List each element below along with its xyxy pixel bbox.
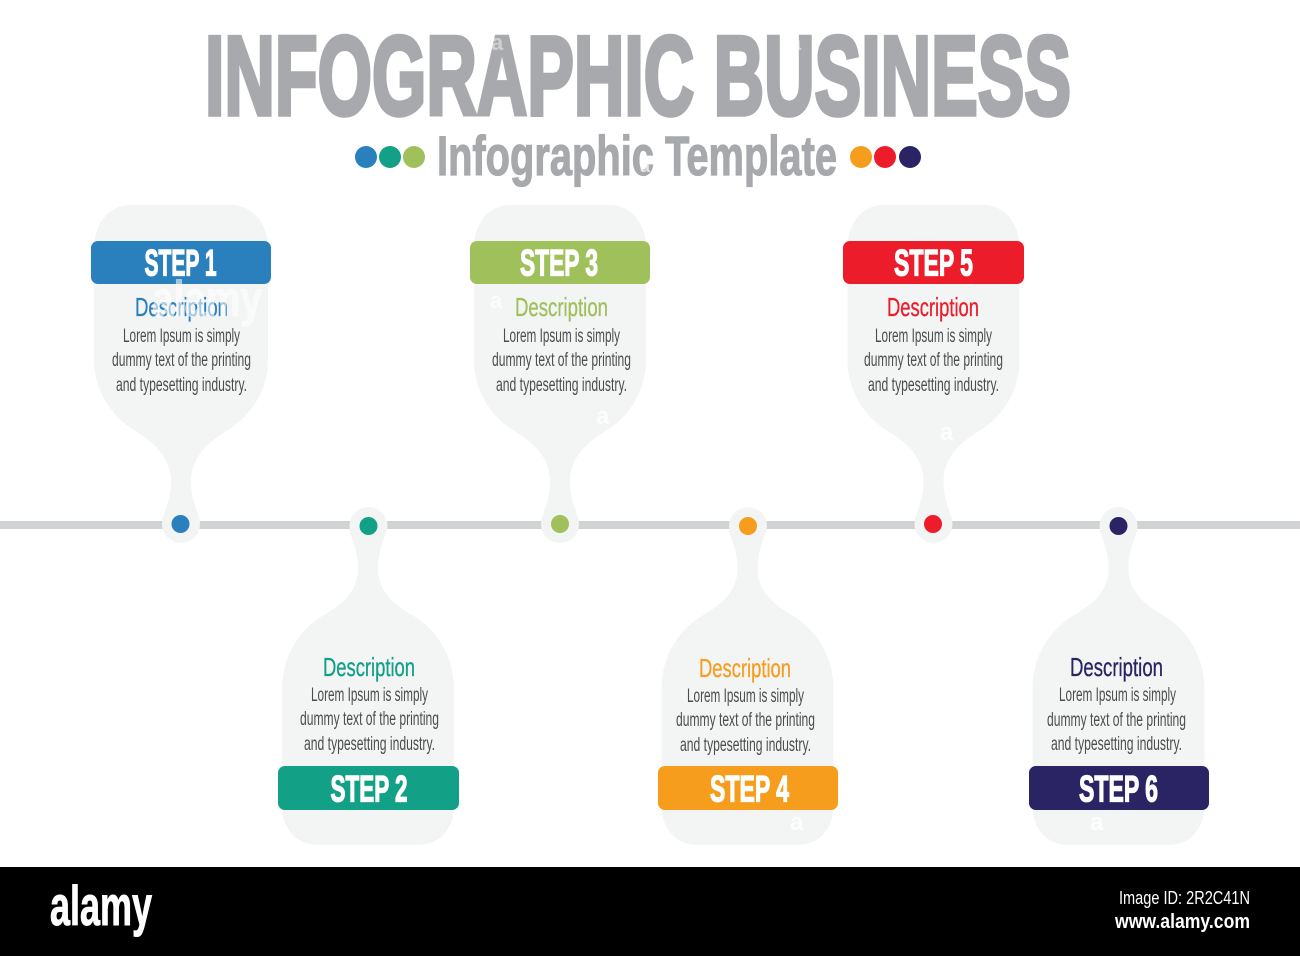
watermark <box>152 30 1104 836</box>
watermark: a <box>940 419 954 446</box>
callout shape <box>474 205 646 543</box>
watermark: a <box>596 403 610 430</box>
step banner <box>843 241 1024 284</box>
callout shape <box>848 205 1020 543</box>
marker dot <box>1110 517 1128 535</box>
callout shape <box>94 205 268 543</box>
image id: Image ID: 2R2C41N <box>1119 888 1250 908</box>
body text: and typesetting industry. <box>116 375 247 396</box>
body text: dummy text of the printing <box>676 710 815 731</box>
body text: dummy text of the printing <box>1047 710 1186 731</box>
panel: step 3 <box>470 205 650 543</box>
body text: and typesetting industry. <box>680 735 811 756</box>
callout shape <box>1032 507 1204 845</box>
panel: step 1 <box>91 205 271 543</box>
watermark: a <box>491 30 504 55</box>
step banner <box>658 766 838 810</box>
panel: step 4 <box>658 507 838 845</box>
callout shape <box>282 507 454 845</box>
step banner <box>91 241 271 284</box>
description heading: Description <box>1070 652 1163 682</box>
step banner <box>278 766 459 810</box>
watermark: alamy <box>152 271 262 327</box>
panel: step 5 <box>843 205 1024 543</box>
body text <box>864 326 1003 396</box>
body text: and typesetting industry. <box>496 375 627 396</box>
marker dot <box>551 515 569 533</box>
body text <box>300 685 439 755</box>
step banner <box>470 241 650 284</box>
body text: Lorem Ipsum is simply <box>687 686 804 707</box>
timeline line <box>0 521 1300 529</box>
step banner <box>1029 766 1209 810</box>
body text: and typesetting industry. <box>304 734 435 755</box>
step label: STEP 2 <box>330 768 408 810</box>
step label: STEP 6 <box>1079 768 1158 810</box>
body text: and typesetting industry. <box>868 375 999 396</box>
website: www.alamy.com <box>1114 911 1250 933</box>
footer bar <box>0 867 1300 956</box>
marker dot <box>360 517 378 535</box>
panel: step 2 <box>278 507 459 845</box>
body text <box>676 686 815 756</box>
subtitle: Infographic Template <box>437 124 837 187</box>
description heading: Description <box>323 652 415 682</box>
footer logo: alamy <box>50 874 152 937</box>
body text: Lorem Ipsum is simply <box>311 685 428 706</box>
colored dots left <box>355 146 425 168</box>
body text <box>112 326 251 396</box>
description heading: Description <box>515 292 608 322</box>
body text: dummy text of the printing <box>492 350 631 371</box>
panel: step 6 <box>1029 507 1209 845</box>
step label: STEP 5 <box>894 242 973 284</box>
body text <box>492 326 631 396</box>
body text: and typesetting industry. <box>1051 734 1182 755</box>
marker dot <box>739 517 757 535</box>
marker dot <box>172 515 190 533</box>
body text: Lorem Ipsum is simply <box>1059 685 1176 706</box>
watermark: a <box>1090 809 1104 836</box>
watermark: a <box>640 156 651 176</box>
body text: Lorem Ipsum is simply <box>503 326 620 347</box>
body text <box>1047 685 1186 755</box>
body text: dummy text of the printing <box>864 350 1003 371</box>
description heading: Description <box>135 292 228 322</box>
step label: STEP 3 <box>520 242 598 284</box>
body text: dummy text of the printing <box>112 350 251 371</box>
callout shape <box>662 507 834 845</box>
step label: STEP 1 <box>144 242 216 284</box>
watermark: a <box>789 30 802 55</box>
watermark: a <box>790 809 804 836</box>
description heading: Description <box>887 292 979 322</box>
body text: dummy text of the printing <box>300 709 439 730</box>
body text: Lorem Ipsum is simply <box>875 326 992 347</box>
step label: STEP 4 <box>710 768 789 810</box>
body text: Lorem Ipsum is simply <box>123 326 240 347</box>
subtitle row <box>355 124 921 187</box>
watermark: a <box>490 288 503 313</box>
colored dots right <box>850 146 921 168</box>
marker dot <box>924 515 942 533</box>
description heading: Description <box>699 653 791 683</box>
